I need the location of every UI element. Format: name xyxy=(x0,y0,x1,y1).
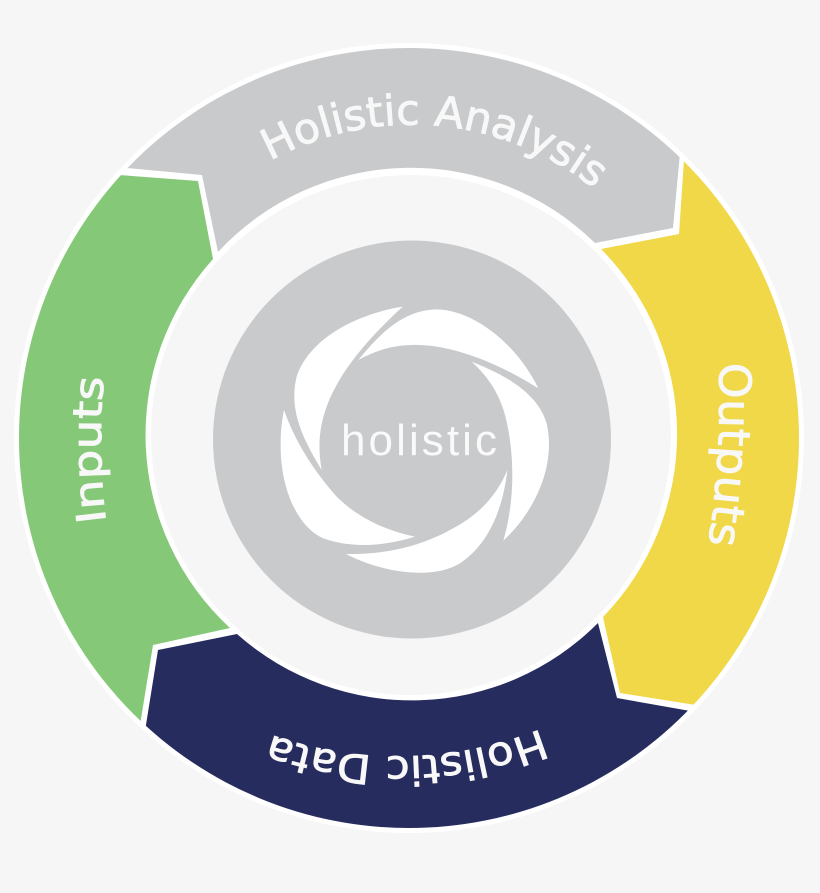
segment: Inputs xyxy=(19,175,230,721)
label: Outputs: Outputs xyxy=(708,364,752,545)
label: Holistic Data: Holistic Data xyxy=(270,730,548,787)
swirl blade 2 xyxy=(358,309,538,388)
swirl blade 4 xyxy=(346,470,507,573)
central grey disc xyxy=(213,240,611,638)
logo: holistic swirl xyxy=(281,307,549,573)
label: Inputs: Inputs xyxy=(72,378,110,522)
inner hole with white edge xyxy=(148,172,674,698)
swirl blade 1 xyxy=(294,307,403,470)
swirl blade 5 xyxy=(281,410,415,545)
segment: Holistic Data xyxy=(146,623,688,828)
swirl blade 3 xyxy=(472,362,549,541)
segment: Outputs xyxy=(601,161,799,705)
segment: Holistic Analysis xyxy=(128,48,680,252)
label: Holistic Analysis: Holistic Analysis xyxy=(260,92,606,186)
logo wordmark: holistic xyxy=(341,416,497,465)
